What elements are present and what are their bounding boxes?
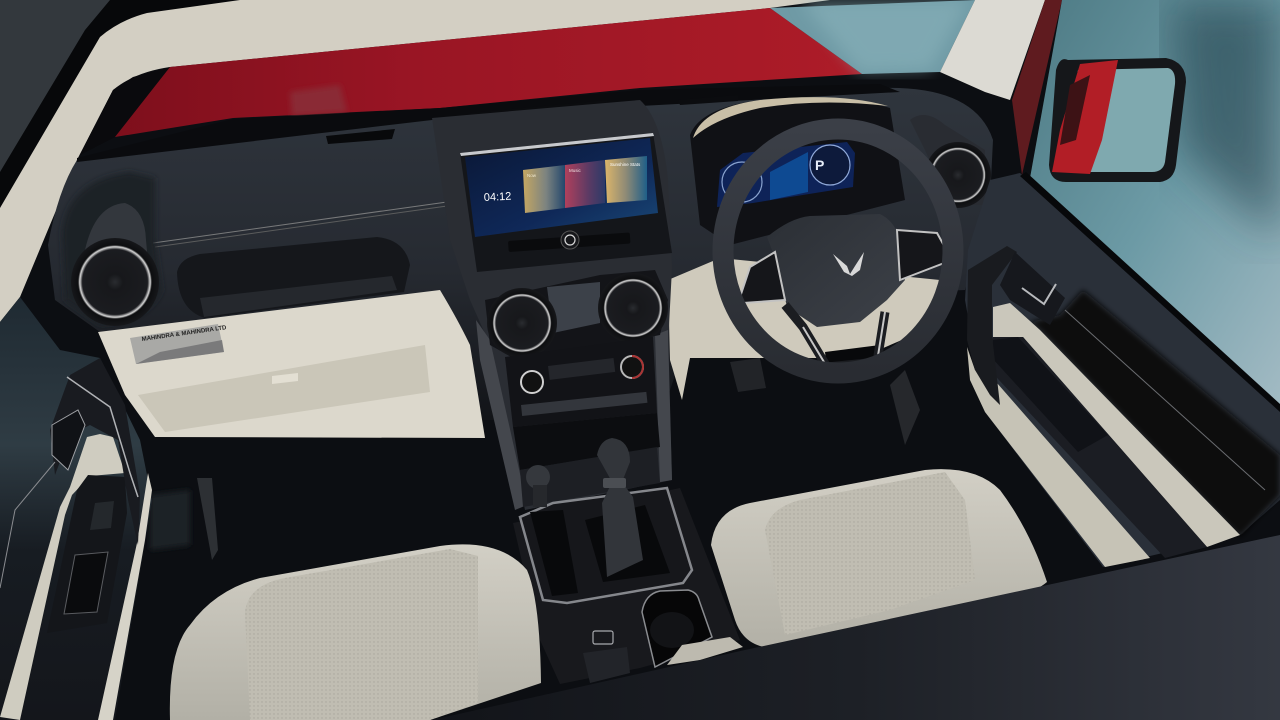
dashboard main body: [48, 88, 993, 420]
infotainment screen: [460, 133, 672, 272]
infotainment screen: Sunshine Stats: [610, 162, 641, 167]
cluster hood with cream top: [690, 97, 905, 245]
logo on steering wheel: [833, 252, 864, 276]
right air vent: [910, 115, 991, 208]
glovebox grab handle: [177, 237, 410, 318]
instrument cluster display: [717, 142, 855, 207]
centre stack: [432, 100, 672, 510]
left air vent: [62, 172, 162, 326]
foreground door sill: [432, 535, 1280, 720]
infotainment screen: Now: [527, 173, 537, 178]
left door panel: [0, 297, 152, 720]
A-pillar right: [940, 0, 1062, 175]
pedals and footwell: [150, 358, 920, 560]
right seat: [711, 469, 1047, 648]
centre console lower: [513, 413, 740, 684]
windshield frame: cream headliner: [0, 0, 830, 322]
passenger dash: cream panel: [98, 290, 485, 438]
side window glass: [1030, 0, 1280, 410]
infotainment screen: Music: [569, 168, 582, 173]
cup holder and switches: [583, 590, 743, 683]
climate controls: [505, 337, 657, 427]
right door panel: [965, 172, 1280, 567]
right cream dash under wheel: [668, 258, 940, 400]
infotainment screen: 04:12: [484, 191, 512, 204]
instrument cluster display: P: [815, 157, 824, 173]
nameplate: MAHINDRA & MAHINDRA LTD: [141, 325, 228, 343]
nameplate: [130, 324, 228, 364]
steering wheel: [723, 129, 953, 373]
red bonnet through windshield: [77, 0, 975, 160]
roof pillar: top-left dark corner: [0, 0, 240, 208]
wing mirror: [1049, 58, 1186, 182]
left seat: [170, 544, 541, 720]
gear lever: [526, 438, 643, 577]
centre vents: [485, 270, 668, 362]
